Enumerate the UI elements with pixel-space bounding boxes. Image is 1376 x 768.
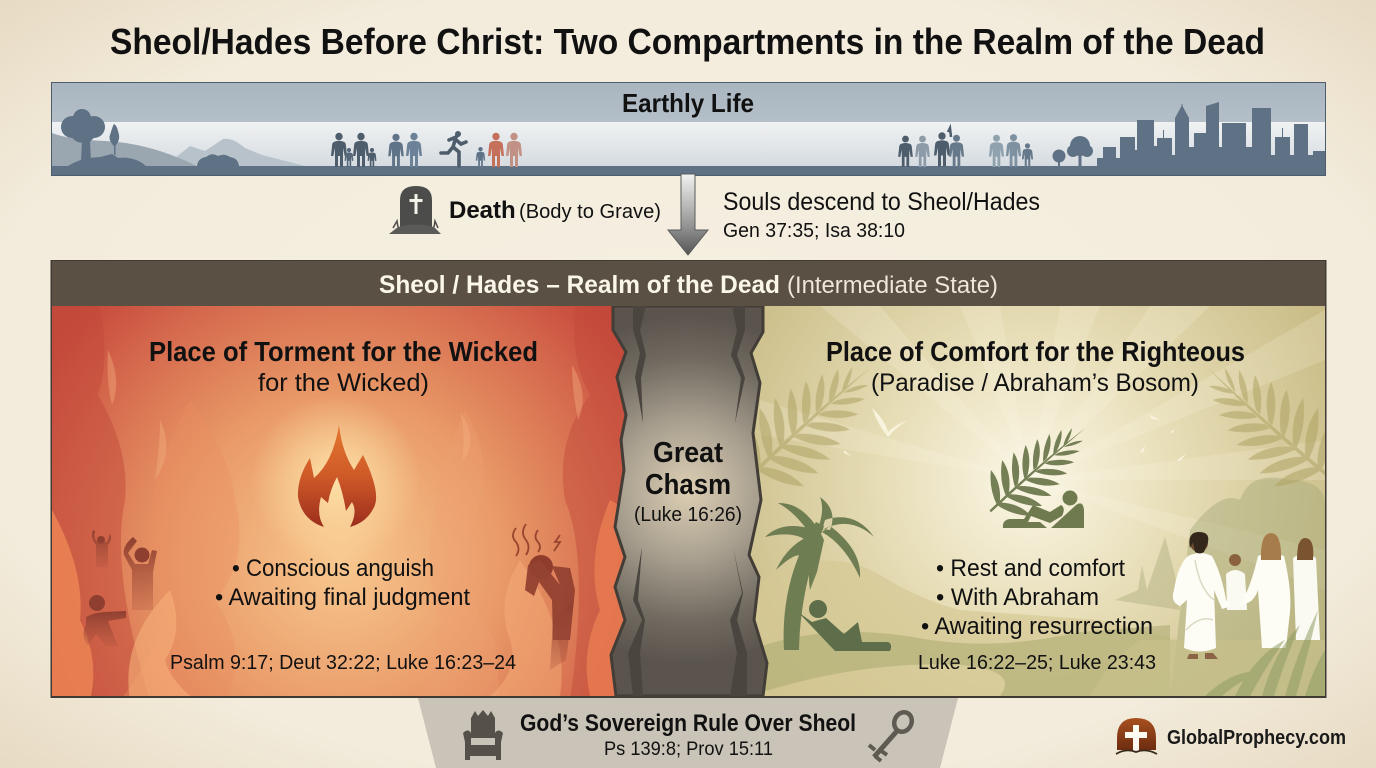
heading: torment: Place of Torment for the Wicked bbox=[149, 336, 538, 367]
bullets: comfort: • Awaiting resurrection bbox=[921, 613, 1153, 640]
raised arms figure bbox=[124, 537, 157, 610]
foliage corner bbox=[1205, 610, 1325, 696]
figures: robed people bbox=[1173, 532, 1320, 659]
arrow: descent bbox=[668, 174, 708, 255]
figure: reclining under palm bbox=[798, 600, 891, 651]
child bbox=[1226, 554, 1247, 610]
chasm label: Great bbox=[653, 437, 723, 469]
woman bbox=[1246, 533, 1290, 648]
chasm label: (Luke 16:26) bbox=[634, 504, 742, 526]
hills bbox=[750, 478, 1325, 696]
panel: great chasm bbox=[611, 306, 767, 696]
palm fronds background bbox=[755, 368, 1325, 486]
reference: sovereign rule: Ps 139:8; Prov 15:11 bbox=[604, 739, 773, 760]
man bbox=[1173, 532, 1232, 659]
bullets: torment bbox=[215, 555, 470, 611]
panel: earthly life bbox=[51, 82, 1326, 176]
title: Sheol/Hades Before Christ: Two Compartments in the Realm of the Dead bbox=[110, 21, 1265, 62]
bullets: comfort: • With Abraham bbox=[936, 584, 1099, 611]
birds and petals bbox=[844, 408, 1186, 461]
logo: GlobalProphecy.com: GlobalProphecy.com bbox=[1167, 727, 1346, 749]
references: torment: Psalm 9:17; Deut 32:22; Luke 16:23–24 bbox=[170, 652, 516, 674]
bullets: comfort bbox=[921, 555, 1153, 640]
label: souls descend: Souls descend to Sheol/Hades bbox=[723, 188, 1040, 216]
heading: sovereign rule: God’s Sovereign Rule Over Sheol bbox=[520, 710, 856, 737]
bullets: torment: • Conscious anguish bbox=[232, 555, 434, 582]
panel: comfort bbox=[750, 306, 1325, 696]
sun rays bbox=[760, 306, 1325, 590]
panel: torment bbox=[52, 306, 627, 700]
subheading: torment: for the Wicked) bbox=[258, 369, 429, 397]
bullets: comfort: • Rest and comfort bbox=[936, 555, 1125, 582]
logo: GlobalProphecy.com bbox=[1116, 718, 1346, 754]
header: sheol: Sheol / Hades – Realm of the Dead bbox=[379, 271, 780, 299]
header: sheol bbox=[52, 261, 1325, 306]
ground bbox=[52, 166, 1325, 176]
heading: comfort: Place of Comfort for the Righteous bbox=[826, 336, 1245, 367]
subheading: comfort: (Paradise / Abraham’s Bosom) bbox=[871, 369, 1199, 397]
people: left group bbox=[331, 131, 522, 167]
bullets: torment: • Awaiting final judgment bbox=[215, 584, 470, 611]
icon: throne bbox=[463, 710, 503, 760]
third person bbox=[1293, 538, 1320, 640]
skyline right bbox=[1097, 102, 1326, 166]
figure: anguished soul right bbox=[513, 524, 575, 670]
small figure bbox=[92, 530, 111, 567]
references: comfort: Luke 16:22–25; Luke 23:43 bbox=[918, 652, 1156, 674]
icon: tombstone bbox=[389, 186, 441, 234]
label: death: Death bbox=[449, 197, 516, 224]
figures: anguished souls left bbox=[83, 530, 157, 646]
chasm label: Chasm bbox=[645, 469, 731, 501]
header: sheol: (Intermediate State) bbox=[787, 272, 998, 299]
heading: earthly life: Earthly Life bbox=[622, 88, 754, 118]
cracks bbox=[628, 306, 747, 696]
flames background bbox=[52, 306, 627, 700]
landscape left bbox=[52, 109, 305, 166]
chasm label bbox=[634, 437, 742, 526]
icon: reclining figure bbox=[1003, 490, 1084, 528]
icon: flame bbox=[251, 395, 421, 565]
fallen figure bbox=[83, 595, 126, 646]
people: right group and trees bbox=[898, 128, 1093, 167]
icon: key bbox=[869, 709, 915, 761]
label: body to grave: (Body to Grave) bbox=[519, 201, 661, 223]
icon: palm tree bbox=[765, 497, 874, 650]
icon: palm branch bbox=[970, 405, 1105, 534]
reference: souls descend: Gen 37:35; Isa 38:10 bbox=[723, 220, 905, 242]
panel: sovereign rule bbox=[418, 698, 958, 768]
panel: sheol frame bbox=[50, 260, 1326, 698]
